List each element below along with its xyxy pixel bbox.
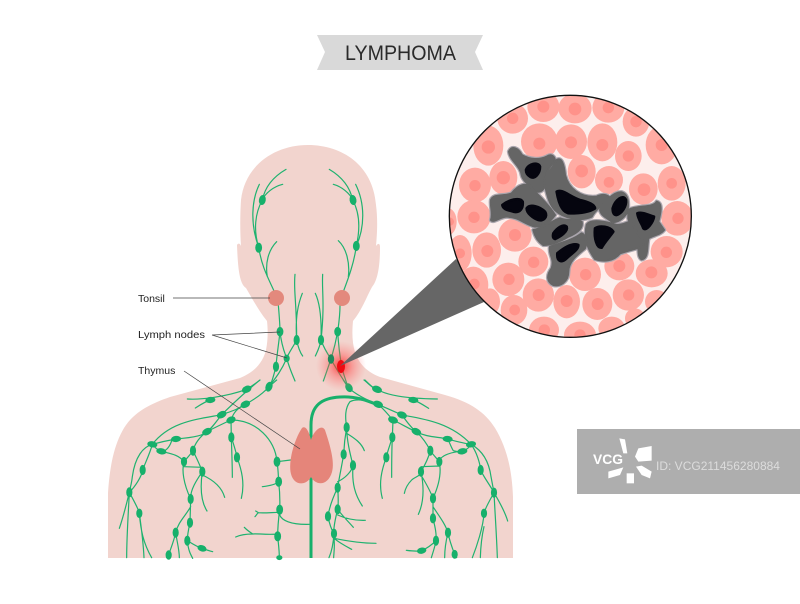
label: thymus: Thymus [138, 365, 175, 377]
magnifier cone [340, 259, 484, 366]
title banner: LYMPHOMA [345, 42, 456, 65]
cell nuclei [446, 101, 684, 341]
thymus [290, 427, 333, 483]
watermark: ID: VCG211456280884 [656, 459, 780, 473]
icon: watermark logo [608, 438, 652, 483]
watermark [577, 429, 800, 494]
lymph vessels: head and neck [253, 169, 376, 389]
label: tonsil: Tonsil [138, 293, 165, 305]
label: tonsil [138, 293, 270, 305]
tonsils [268, 290, 350, 306]
label: lymph nodes [138, 329, 287, 358]
main lymph duct [311, 397, 378, 558]
title banner [317, 35, 483, 70]
label: lymph nodes: Lymph nodes [138, 329, 205, 341]
tissue cells [450, 96, 691, 337]
tumour mass [491, 148, 664, 285]
lymph vessels: left side [119, 380, 310, 560]
inflamed lymph node glow [316, 341, 366, 391]
magnified lymphoma tissue [440, 91, 693, 348]
label: thymus [138, 365, 300, 449]
lymph vessels: right side [325, 380, 508, 558]
dark necrotic cores [502, 164, 654, 261]
body silhouette [108, 145, 513, 558]
watermark: VCG [593, 452, 623, 467]
